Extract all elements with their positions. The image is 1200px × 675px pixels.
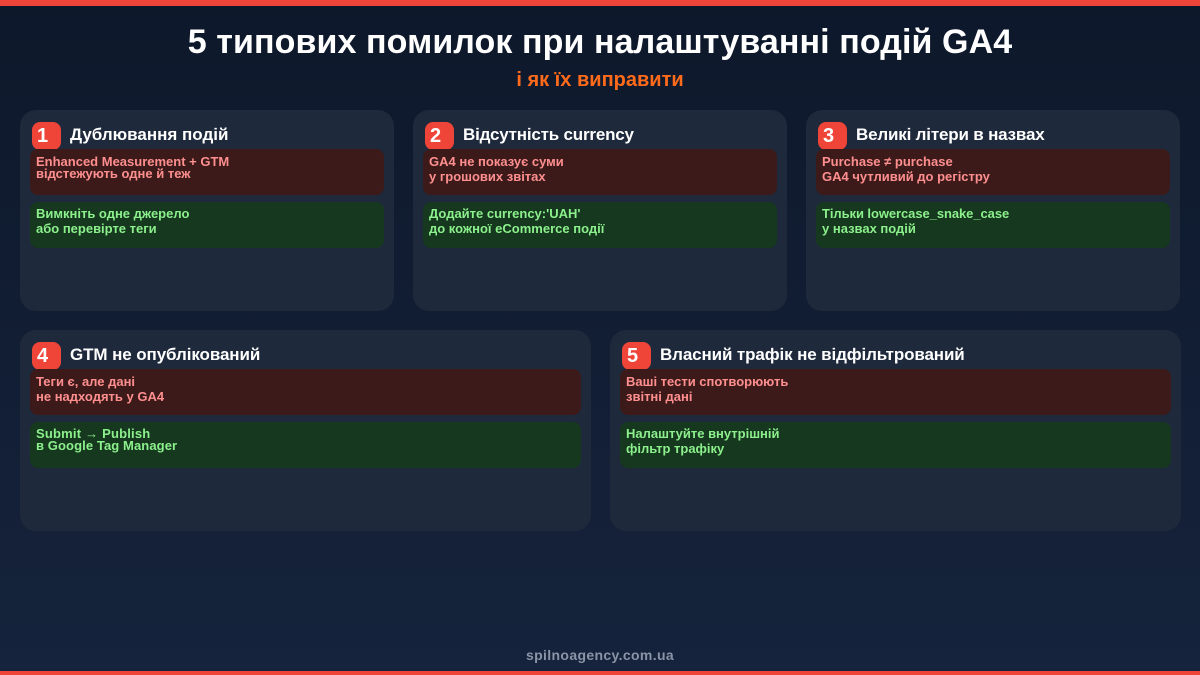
solution 5: Налаштуйте внутрішній (626, 426, 780, 441)
problem 5: звітні дані (626, 389, 692, 404)
solution 1: або перевірте теги (36, 221, 157, 236)
badge 5: 5 (627, 345, 638, 367)
solution 3: у назвах подій (822, 221, 916, 236)
bottom accent bar (0, 671, 1200, 675)
badge 2 (425, 122, 454, 150)
problem 1: Enhanced Measurement + GTM (36, 154, 229, 169)
panel: mistake 5 (610, 330, 1181, 531)
subtitle: і як їх виправити (516, 69, 684, 91)
problem 2: GA4 не показує суми (429, 154, 564, 169)
solution 4: в Google Tag Manager (36, 438, 177, 453)
badge 1: 1 (37, 125, 48, 147)
panel: mistake 2 (413, 110, 787, 311)
badge 5 (622, 342, 651, 370)
heading 4: GTM не опублікований (70, 345, 260, 364)
problem 2 (423, 149, 777, 195)
badge 3 (818, 122, 847, 150)
problem 4: Теги є, але дані (36, 374, 135, 389)
problem 5: Ваші тести спотворюють (626, 374, 788, 389)
solution 2: Додайте currency:'UAH' (429, 206, 580, 221)
top accent bar (0, 0, 1200, 6)
badge 3: 3 (823, 125, 834, 147)
solution 1: Вимкніть одне джерело (36, 206, 189, 221)
badge 1 (32, 122, 61, 150)
heading 3: Великі літери в назвах (856, 125, 1045, 144)
problem 4: не надходять у GA4 (36, 389, 164, 404)
problem 3: GA4 чутливий до регістру (822, 169, 990, 184)
solution 2: до кожної eCommerce події (429, 221, 604, 236)
solution 1 (30, 202, 384, 248)
problem 3 (816, 149, 1170, 195)
badge 2: 2 (430, 125, 441, 147)
solution 5: фільтр трафіку (626, 441, 724, 456)
problem 4 (30, 369, 581, 415)
heading 1: Дублювання подій (70, 125, 228, 144)
problem 5 (620, 369, 1171, 415)
panel: mistake 1 (20, 110, 394, 311)
heading 5: Власний трафік не відфільтрований (660, 345, 965, 364)
badge 4: 4 (37, 345, 48, 367)
solution 4: Submit → Publish (36, 426, 150, 441)
panel: mistake 3 (806, 110, 1180, 311)
title: 5 типових помилок при налаштуванні подій GA4 (188, 23, 1012, 61)
heading 2: Відсутність currency (463, 125, 634, 144)
solution 2 (423, 202, 777, 248)
badge 4 (32, 342, 61, 370)
solution 3 (816, 202, 1170, 248)
solution 5 (620, 422, 1171, 468)
problem 1 (30, 149, 384, 195)
panel: mistake 4 (20, 330, 591, 531)
solution 4 (30, 422, 581, 468)
solution 3: Тільки lowercase_snake_case (822, 206, 1009, 221)
problem 3: Purchase ≠ purchase (822, 154, 953, 169)
footer website: spilnoagency.com.ua (526, 647, 674, 663)
problem 1: відстежують одне й теж (36, 166, 190, 181)
problem 2: у грошових звітах (429, 169, 546, 184)
